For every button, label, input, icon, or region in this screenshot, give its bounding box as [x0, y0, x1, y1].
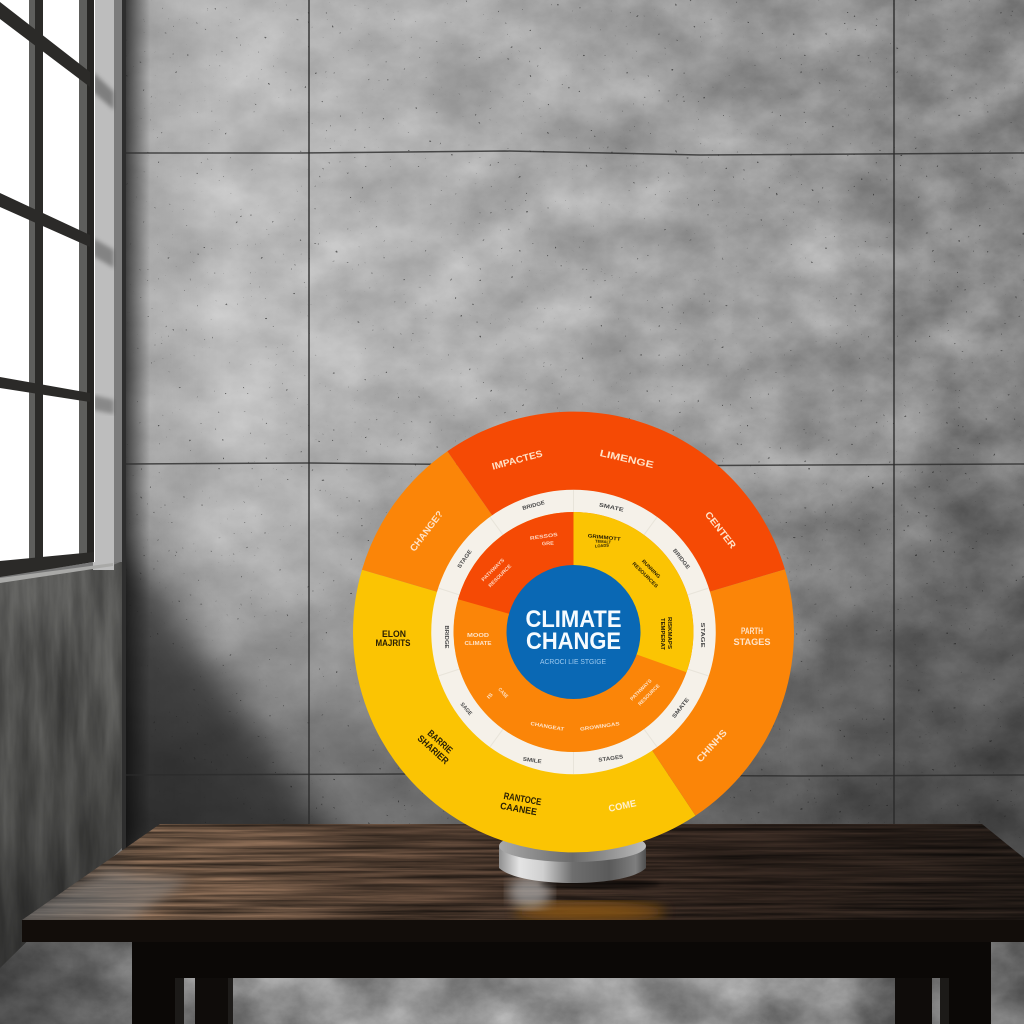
- ring labels: SMATE: [598, 502, 624, 514]
- outer ring labels: [376, 448, 770, 818]
- outer ring labels: CENTER: [702, 510, 738, 551]
- left side wall below the window: [0, 555, 125, 970]
- back concrete wall: [126, 0, 1024, 858]
- inner disc labels: MOOD: [467, 633, 490, 639]
- inner disc labels: CLIMATE: [464, 641, 492, 647]
- ring labels: STAGES: [598, 754, 624, 764]
- cream ring: [442, 501, 704, 763]
- climate wheel: [353, 412, 794, 852]
- inner disc labels: LOADS: [595, 542, 609, 548]
- inner disc labels: PATHWAYS: [629, 678, 654, 702]
- ring labels: SAGE: [459, 702, 473, 717]
- ring labels: BRIDGE: [522, 500, 546, 512]
- inner disc labels: TEMPERAT: [659, 618, 665, 650]
- inner disc labels: RESOURCE: [637, 683, 662, 707]
- ring labels: BRIDGE: [671, 548, 691, 571]
- ring labels: STAGE: [457, 549, 474, 570]
- ring labels: [438, 490, 708, 774]
- inner disc labels: GROWINGAS: [580, 721, 621, 733]
- inner disc labels: RESOURCE: [488, 563, 514, 589]
- outer ring labels: COME: [608, 798, 637, 815]
- inner disc labels: RESSOS: [530, 532, 559, 542]
- hub title: [526, 606, 622, 655]
- window with reveal and frame: [0, 0, 126, 850]
- hub title: CHANGE: [526, 628, 621, 655]
- inner disc labels: RESOURCES: [631, 561, 659, 590]
- outer ring labels: CHANGE?: [408, 509, 446, 554]
- inner disc labels: GRE: [542, 541, 555, 547]
- table legs: [132, 940, 991, 1024]
- metal stand: [499, 830, 646, 883]
- inner disc labels: [464, 532, 672, 733]
- ring labels: SMILE: [522, 757, 542, 765]
- outer ring labels: LIMENGE: [599, 448, 655, 471]
- outer ring labels: IMPACTES: [491, 449, 544, 473]
- ring labels: BRIDGE: [443, 626, 449, 649]
- hub title: CLIMATE: [526, 606, 622, 633]
- inner disc labels: RISKMAPS: [666, 617, 672, 650]
- inner disc labels: CASE: [496, 687, 509, 700]
- outer ring labels: PARTH: [741, 626, 763, 637]
- inner disc segments: [454, 512, 694, 752]
- wooden table: [0, 824, 1024, 1024]
- table top with wood grain: [0, 824, 1024, 922]
- table front edge: [22, 920, 1024, 942]
- inner disc labels: TEMALT: [595, 538, 612, 545]
- inner disc labels: RUNNING: [640, 559, 661, 580]
- outer ring labels: CAANEE: [499, 801, 538, 818]
- outer ring labels: RANTOCE: [503, 791, 542, 808]
- inner disc labels: IS: [486, 691, 495, 701]
- ring labels: STAGE: [699, 623, 705, 648]
- floor: [0, 942, 1024, 1024]
- outer ring segments: [353, 412, 794, 852]
- inner disc labels: PATHWAYS: [481, 557, 507, 583]
- ring labels: SMATE: [671, 697, 691, 720]
- outer ring labels: STAGES: [734, 637, 770, 648]
- inner disc labels: CHANGEAT: [530, 721, 564, 733]
- outer ring labels: CHINHS: [695, 728, 730, 765]
- hub subtitle: ACROCI LIE STGIGE: [540, 657, 606, 666]
- inner disc labels: GRIMMOTT: [587, 533, 621, 543]
- outer ring labels: SHARIER: [415, 733, 451, 767]
- blue centre hub: [506, 565, 640, 699]
- outer ring labels: BARRIE: [425, 728, 455, 756]
- outer ring labels: MAJRITS: [376, 638, 410, 649]
- outer ring labels: ELON: [382, 629, 406, 640]
